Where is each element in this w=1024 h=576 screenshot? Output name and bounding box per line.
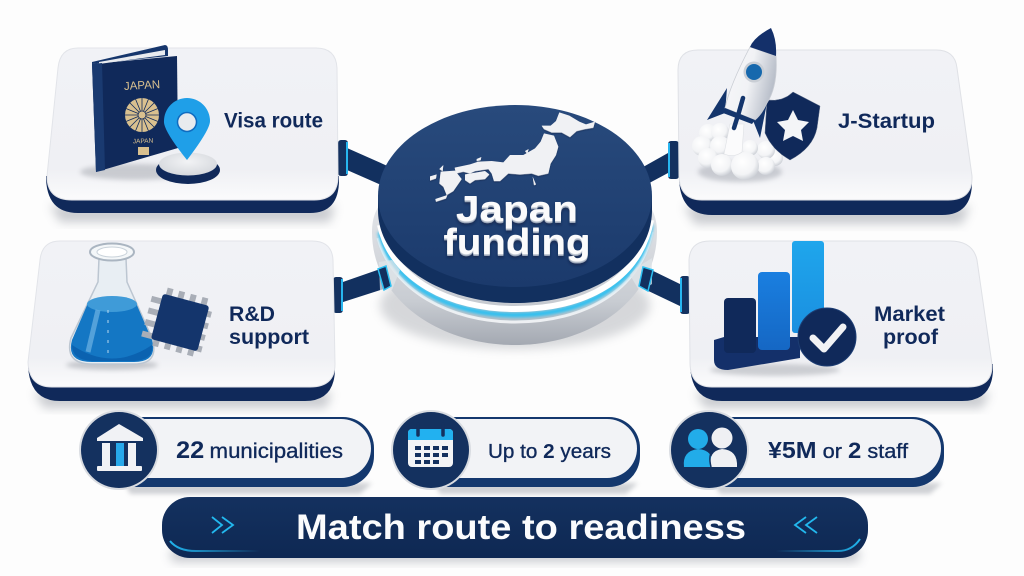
- panel: visa route: [46, 45, 339, 222]
- label: market proof: proof: [883, 326, 939, 349]
- connector: R&D support to hub: [333, 267, 390, 313]
- chrysanthemum emblem: [125, 98, 159, 132]
- label: R&D support: R&D: [229, 303, 275, 326]
- stat pill: ¥5M or 2 staff: [669, 410, 944, 494]
- connector sockets: [379, 260, 400, 290]
- stat label: ¥5M or 2 staff: [768, 437, 908, 463]
- rocket body: [707, 28, 776, 138]
- icon: calendar: [391, 410, 471, 490]
- stat label: Up to 2 years: [488, 441, 611, 463]
- banner text: Match route to readiness: [296, 508, 746, 547]
- label: market proof: Market: [874, 303, 945, 326]
- panel: market proof: [689, 241, 993, 408]
- icon: location pin: [156, 98, 220, 184]
- stat label: 22 municipalities: [176, 437, 343, 464]
- panel: R&D support: [28, 241, 335, 408]
- label: R&D support: [229, 303, 309, 349]
- glow ring: [380, 225, 651, 315]
- icon: chip: [140, 284, 215, 358]
- label: visa route: Visa route: [224, 110, 323, 132]
- hub title: [444, 188, 590, 262]
- silver base: [372, 200, 657, 345]
- connector: market proof to hub: [640, 267, 690, 314]
- hub title: Japan: [456, 188, 578, 229]
- icon: left chevrons: [795, 517, 817, 533]
- label: J-Startup: J-Startup: [838, 110, 935, 133]
- disc top: [378, 105, 652, 287]
- icon: government building: [79, 410, 159, 490]
- map of Japan: [430, 112, 595, 202]
- panel: J-Startup: [678, 28, 972, 224]
- icon: bar chart with check: [710, 241, 856, 376]
- stat pill: 22 municipalities: [79, 410, 374, 494]
- connector: visa route to hub: [338, 140, 392, 188]
- label: market proof: [874, 303, 945, 349]
- icon: rocket with shield: [692, 28, 820, 182]
- stat pill: up to 2 years: [391, 410, 640, 494]
- icon: passport: [92, 45, 178, 172]
- connector: J-Startup to hub: [636, 141, 679, 188]
- cloud exhaust: [692, 123, 783, 182]
- shield: [765, 92, 820, 160]
- hub title: funding: [444, 221, 590, 262]
- banner: match route to readiness: [162, 497, 868, 562]
- central hub: Japan funding: [372, 105, 657, 349]
- disc side: [378, 196, 652, 303]
- icon: flask: [66, 244, 158, 370]
- icon: right chevrons: [212, 517, 233, 533]
- icon: people: [669, 410, 749, 490]
- icon: passport: JAPAN: [133, 138, 154, 145]
- icon: passport: JAPAN: [124, 79, 160, 93]
- label: R&D support: support: [229, 326, 309, 349]
